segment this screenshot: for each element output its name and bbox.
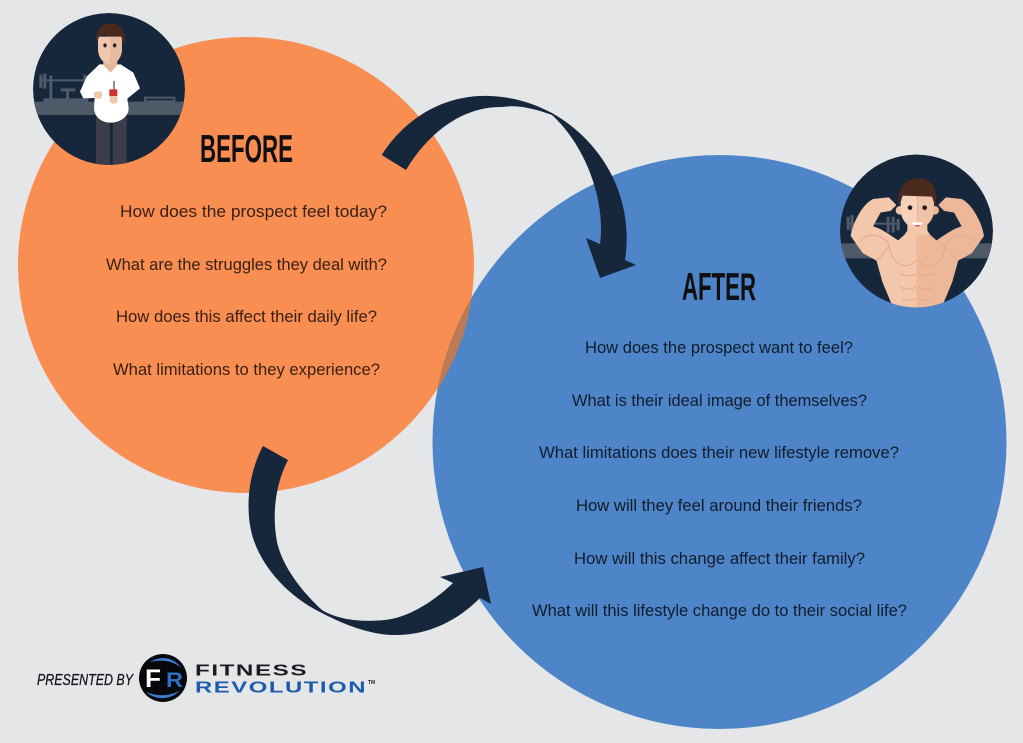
- logo badge: R: [166, 669, 183, 692]
- text block: before questions: What are the struggles they deal with?: [106, 256, 387, 274]
- circle overlap: [438, 297, 472, 388]
- logo: Fitness Revolution: REVOLUTION: [195, 680, 367, 696]
- heading: after: AFTER: [682, 266, 756, 309]
- panel: after circle: [432, 155, 1006, 729]
- left half of body: [852, 198, 917, 309]
- logo badge: F: [145, 665, 161, 693]
- text block: after questions: What is their ideal image of themselves?: [572, 392, 867, 410]
- text block: after questions: How does the prospect want to feel?: [585, 339, 853, 357]
- right half of body: [917, 198, 983, 309]
- presented by label: PRESENTED BY: [37, 672, 134, 689]
- logo: Fitness Revolution: [139, 654, 375, 702]
- heading: before: BEFORE: [200, 128, 293, 171]
- text block: after questions: What will this lifestyle change do to their social life?: [532, 602, 907, 620]
- text block: after questions: What limitations does their new lifestyle remove?: [539, 444, 899, 462]
- icon: man before: [33, 13, 186, 167]
- text block: before questions: How does the prospect feel today?: [120, 203, 387, 221]
- arrow: before to after (top): [382, 96, 636, 278]
- text block: after questions: How will they feel around their friends?: [576, 497, 862, 515]
- icon: muscular man after: [840, 154, 993, 309]
- logo badge: [139, 654, 187, 702]
- panel: before circle: [18, 37, 474, 493]
- text block: before questions: How does this affect their daily life?: [116, 308, 377, 326]
- text block: before questions: What limitations to they experience?: [113, 361, 380, 379]
- arrow: before to after (bottom): [249, 446, 491, 635]
- text block: after questions: [532, 339, 907, 620]
- wordmark: FITNESS: [195, 662, 308, 680]
- text block: after questions: How will this change affect their family?: [574, 550, 865, 568]
- text block: before questions: [106, 203, 387, 379]
- logo: Fitness Revolution: TM: [368, 680, 375, 686]
